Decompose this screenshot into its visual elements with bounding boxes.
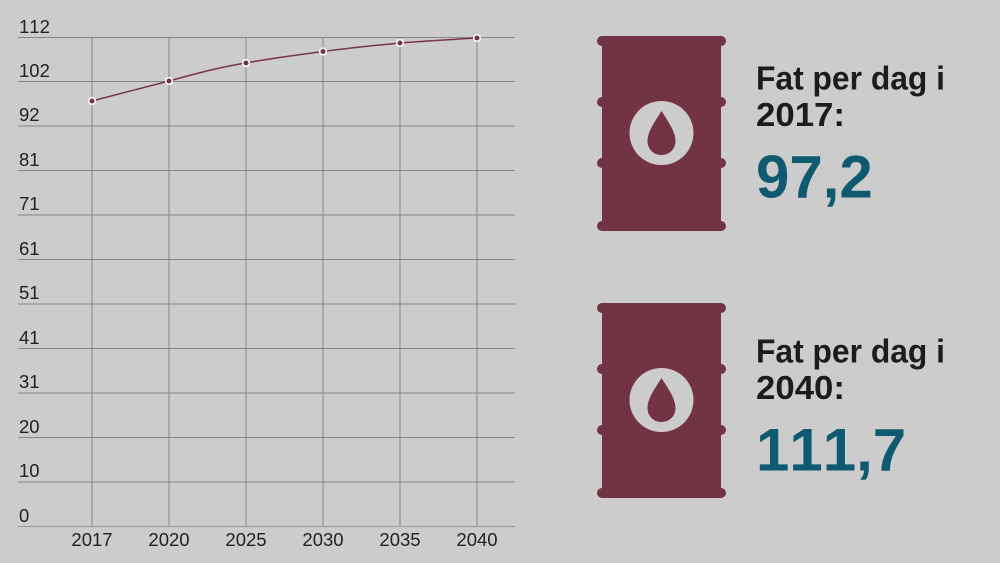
heading 2040 [756, 332, 945, 406]
y axis labels: 81 [19, 149, 40, 170]
data points [89, 35, 480, 104]
icon: oil barrel 2017 [597, 36, 726, 231]
heading 2017: Fat per dag i [756, 60, 945, 96]
y axis labels: 0 [19, 505, 29, 526]
y axis labels: 92 [19, 104, 40, 125]
x axis labels [71, 529, 498, 550]
x axis labels: 2025 [225, 529, 267, 550]
value 2017: 97,2 [756, 144, 873, 210]
y axis labels: 102 [19, 60, 50, 81]
y axis labels: 112 [19, 16, 50, 37]
line chart [18, 16, 515, 550]
x axis labels: 2035 [379, 529, 421, 550]
icon: oil barrel 2040 [597, 303, 726, 498]
y axis labels: 51 [19, 282, 40, 303]
y axis labels [19, 16, 50, 526]
x axis labels: 2017 [71, 529, 113, 550]
data line [92, 38, 477, 101]
heading 2017: 2017: [756, 96, 845, 133]
y axis labels: 71 [19, 193, 40, 214]
y axis labels: 31 [19, 371, 40, 392]
x axis labels: 2030 [302, 529, 344, 550]
y axis labels: 10 [19, 460, 40, 481]
value 2040: 111,7 [756, 416, 906, 484]
y axis labels: 41 [19, 327, 40, 348]
heading 2040: 2040: [756, 369, 845, 406]
heading 2040: Fat per dag i [756, 332, 945, 370]
x axis labels: 2040 [456, 529, 498, 550]
x axis labels: 2020 [148, 529, 190, 550]
y axis labels: 61 [19, 238, 40, 259]
y axis labels: 20 [19, 416, 40, 437]
heading 2017 [756, 60, 945, 133]
